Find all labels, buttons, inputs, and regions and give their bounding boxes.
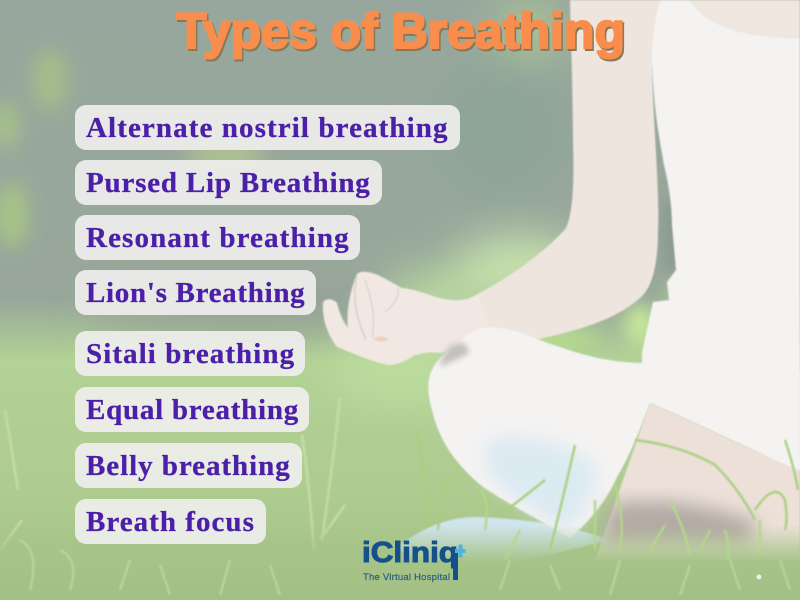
- list item: equal breathing: Equal breathing: [86, 394, 299, 426]
- list item: pursed lip breathing: Pursed Lip Breathing: [86, 167, 371, 199]
- title: Types of Breathing: [178, 5, 626, 61]
- foreground grass: [0, 525, 800, 600]
- list item: lion's breathing: Lion's Breathing: [86, 277, 305, 309]
- white top: [642, 0, 800, 480]
- neck skin: [690, 0, 800, 38]
- list item: pursed lip breathing: [75, 160, 382, 205]
- list item: alternate nostril breathing: [75, 105, 460, 150]
- list item: sitali breathing: Sitali breathing: [86, 338, 295, 370]
- white flower speck: [756, 574, 762, 580]
- list item: breath focus: Breath focus: [86, 506, 255, 538]
- list item: lion's breathing: [75, 270, 316, 315]
- list item: alternate nostril breathing: Alternate nostril breathing: [86, 112, 449, 144]
- list item: sitali breathing: [75, 331, 305, 376]
- list item: belly breathing: Belly breathing: [86, 450, 291, 482]
- logo: iCliniq: The Virtual Hospital: [363, 572, 450, 583]
- list item: belly breathing: [75, 443, 302, 488]
- logo: iCliniq: [362, 540, 466, 583]
- list item: resonant breathing: [75, 215, 360, 260]
- calf: [595, 403, 800, 560]
- mat: [395, 517, 610, 562]
- background grass blades left: [0, 398, 345, 550]
- list item: breath focus: [75, 499, 266, 544]
- arm: [395, 0, 800, 562]
- white trousers: [428, 328, 800, 538]
- title: Types of Breathing: [176, 3, 625, 59]
- icon: hand with mudra: [323, 272, 495, 365]
- list item: resonant breathing: Resonant breathing: [86, 222, 350, 254]
- list item: equal breathing: [75, 387, 309, 432]
